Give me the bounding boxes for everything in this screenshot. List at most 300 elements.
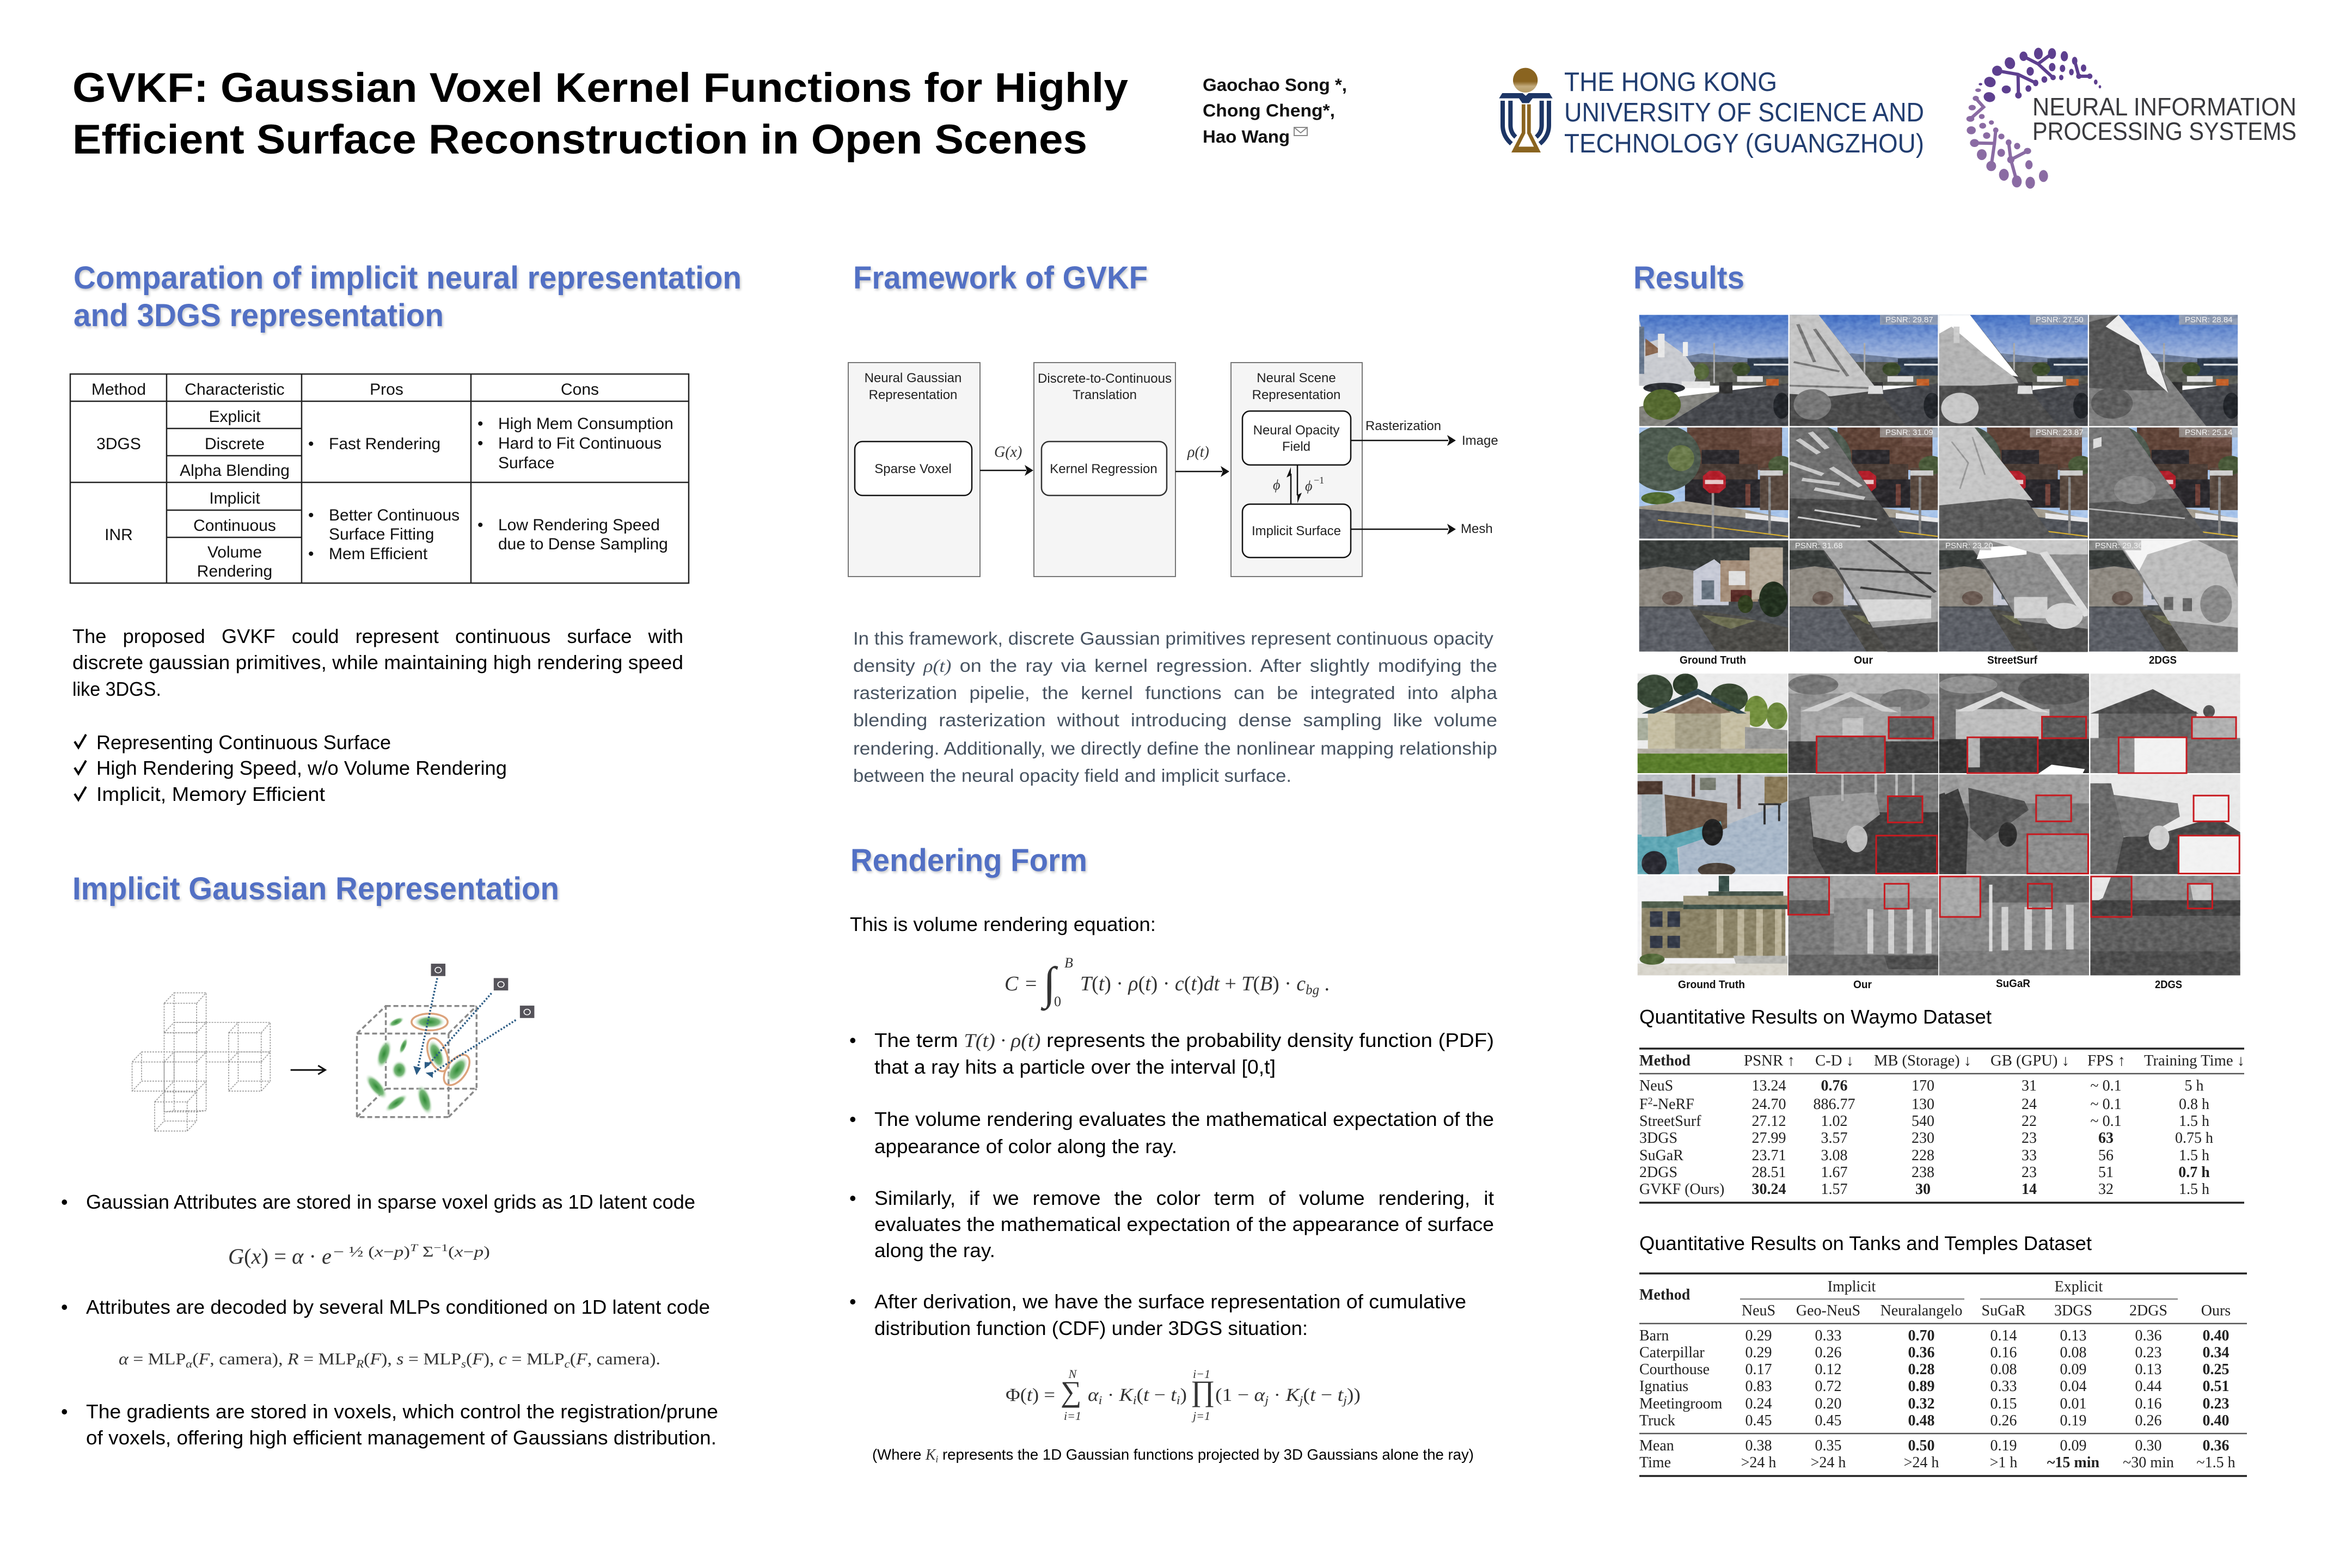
logo: HKUST Guangzhou: UNIVERSITY OF SCIENCE AND	[1564, 98, 1924, 127]
table: Waymo results: 24.70	[1752, 1096, 1786, 1113]
table: Waymo results: 23	[2022, 1164, 2037, 1181]
formula: MLP decoding: (	[364, 1349, 370, 1368]
table: Waymo results: C-D ↓	[1815, 1052, 1854, 1069]
table: Tanks and Temples results: Neuralangelo	[1881, 1302, 1962, 1319]
block: neural gaussian representation: Sparse Voxel	[874, 462, 952, 476]
table: Tanks and Temples results: 0.13	[2060, 1327, 2086, 1344]
check list: Representing Continuous Surface	[96, 731, 391, 754]
logo: Neural Information Processing Systems: NEURAL INFORMATION	[2032, 93, 2296, 121]
footnote: represents the 1D Gaussian functions projected by 3D Gaussians alone the ray)	[938, 1446, 1474, 1463]
comparison table: Characteristic	[185, 381, 285, 399]
formula: CDF: ∑	[1061, 1375, 1081, 1408]
bullet list: gaussian attributes: of voxels, offering high efficient management of Gaussians distribution.	[86, 1426, 716, 1449]
diagram labels: −1	[1314, 475, 1324, 486]
barn 2DGS	[2090, 673, 2240, 773]
table: Tanks and Temples results: 0.28	[1908, 1361, 1935, 1378]
formula: CDF: Φ(t) =	[1006, 1385, 1055, 1405]
table: Waymo results: 0.75 h	[2175, 1130, 2213, 1147]
table: Waymo results: 1.57	[1821, 1181, 1848, 1198]
table: Waymo results: 31	[2022, 1077, 2037, 1094]
table: Tanks and Temples results: 0.38	[1745, 1437, 1772, 1454]
table: Waymo results: 27.99	[1752, 1130, 1786, 1147]
table: Waymo results: 0.7 h	[2178, 1164, 2210, 1181]
truck ground truth	[1638, 774, 1787, 877]
table: Tanks and Temples results: >24 h	[1741, 1454, 1776, 1471]
comparison table: •	[308, 435, 314, 453]
formula: MLP decoding: F, camera).	[576, 1349, 654, 1368]
comparison table: Volume	[207, 543, 262, 561]
arrow	[291, 1065, 326, 1074]
formula: volume rendering: ∫	[1040, 958, 1058, 1011]
diagram labels	[994, 419, 1498, 536]
table: Tanks and Temples results: 0.04	[2060, 1378, 2086, 1395]
bullet list: gaussian attributes: •	[61, 1296, 68, 1318]
table: Tanks and Temples results: 0.33	[1815, 1327, 1841, 1344]
table: Waymo results: ~ 0.1	[2090, 1113, 2122, 1130]
diagram labels: ϕ	[1273, 477, 1280, 493]
table: Waymo results: 3.08	[1821, 1147, 1848, 1164]
courthouse sugar	[1939, 876, 2089, 975]
courthouse ours	[1788, 876, 1938, 975]
formula: MLP decoding: s	[461, 1357, 466, 1370]
formula: MLP decoding: (	[466, 1349, 472, 1368]
logo: Neural Information Processing Systems	[1967, 48, 2296, 189]
formula: CDF: i	[1099, 1393, 1102, 1407]
bullet list: gaussian attributes: •	[61, 1400, 68, 1423]
table: Tanks and Temples results: 0.16	[1990, 1344, 2017, 1361]
table: Tanks and Temples results: Ours	[2201, 1302, 2231, 1319]
table: Tanks and Temples results: 0.89	[1908, 1378, 1935, 1395]
bullet list: rendering: •	[849, 1187, 856, 1209]
intro paragraph: like 3DGS.	[72, 678, 161, 700]
table: Tanks and Temples results: >24 h	[1904, 1454, 1939, 1471]
comparison table: •	[477, 516, 483, 534]
heading: results: Results	[1633, 260, 1744, 296]
comparison table: Discrete	[205, 435, 265, 453]
table: Tanks and Temples results: ~30 min	[2123, 1454, 2174, 1471]
bullet list: gaussian attributes: •	[61, 1191, 68, 1213]
table: Tanks and Temples results: 0.23	[2203, 1395, 2229, 1412]
table: Waymo results: MB (Storage) ↓	[1874, 1052, 1971, 1069]
photo row 3 ground truth	[1639, 540, 1788, 652]
gaussians	[361, 1014, 475, 1117]
formula: CDF: i	[1177, 1393, 1180, 1407]
truck 2DGS	[2090, 774, 2240, 874]
PSNR labels: PSNR: 29.36	[2095, 541, 2143, 550]
courthouse ground truth	[1638, 876, 1787, 975]
PSNR labels: PSNR: 23.20	[1945, 541, 1993, 550]
table: Waymo results: 30.24	[1752, 1181, 1786, 1198]
table: Waymo results: 24	[2022, 1096, 2037, 1113]
formula: gaussian: − ½ ( x−p)	[333, 1244, 408, 1260]
diagram labels: ϕ	[1305, 478, 1312, 494]
table: Waymo results: 27.12	[1752, 1113, 1786, 1130]
table: Tanks and Temples results: 0.48	[1908, 1412, 1935, 1429]
formula: volume rendering: C	[1004, 972, 1019, 995]
table: Waymo results: 230	[1912, 1130, 1934, 1147]
formula: MLP decoding: c	[565, 1357, 571, 1370]
table: Tanks and Temples results: 0.72	[1815, 1378, 1841, 1395]
column captions street: Ground Truth	[1680, 654, 1746, 666]
photo row 1 ground truth	[1639, 315, 1788, 426]
table: Waymo results: 63	[2098, 1130, 2114, 1147]
comparison table	[70, 374, 689, 583]
table: Waymo results: GVKF (Ours)	[1639, 1181, 1724, 1198]
diagram labels: Mesh	[1461, 522, 1493, 536]
table: Tanks and Temples results: 3DGS	[2054, 1302, 2092, 1319]
block: neural gaussian representation	[848, 363, 980, 577]
comparison table: Pros	[370, 381, 403, 399]
column captions tanks: SuGaR	[1996, 978, 2031, 990]
block: discrete-to-continuous translation: Discrete-to-Continuous	[1038, 371, 1172, 386]
table: Waymo results: 56	[2098, 1147, 2114, 1164]
table: Tanks and Temples results: 0.16	[2135, 1395, 2161, 1412]
camera rays	[418, 978, 516, 1075]
table: Tanks and Temples results: Truck	[1639, 1412, 1675, 1429]
formula: gaussian: −1	[434, 1242, 448, 1254]
formula: volume rendering: bg	[1306, 983, 1319, 997]
formula: CDF: )	[1180, 1385, 1187, 1405]
photo row 1 ours	[1789, 315, 1938, 426]
table: Waymo results: F	[1639, 1096, 1648, 1113]
table: Tanks and Temples results: >24 h	[1811, 1454, 1846, 1471]
panel: framework of GVKF	[848, 260, 1498, 786]
table: Tanks and Temples results: 0.24	[1745, 1395, 1772, 1412]
block: neural scene representation	[1231, 363, 1362, 577]
diagram: sparse voxels to gaussians	[132, 964, 534, 1131]
table: Waymo results: NeuS	[1639, 1077, 1673, 1094]
formula: gaussian: (	[448, 1244, 455, 1260]
comparison table: Alpha Blending	[180, 462, 290, 480]
truck sugar	[1939, 774, 2089, 874]
table: Tanks and Temples results: 0.51	[2203, 1378, 2229, 1395]
table: Waymo results: 30	[1915, 1181, 1931, 1198]
comparison table: Surface	[498, 454, 554, 472]
table: Tanks and Temples results: 0.35	[1815, 1437, 1841, 1454]
PSNR labels: PSNR: 29.87	[1885, 315, 1933, 324]
table: Tanks and Temples results: 0.45	[1745, 1412, 1772, 1429]
formula: CDF: i	[1133, 1393, 1136, 1407]
formula: gaussian: x−p)	[455, 1244, 488, 1260]
formula: CDF: t − t	[1310, 1385, 1343, 1405]
column captions tanks: Our	[1853, 979, 1872, 991]
table: Tanks and Temples results: 0.23	[2135, 1344, 2161, 1361]
heading: Tanks table: Quantitative Results on Tanks and Temples Dataset	[1639, 1232, 2092, 1254]
table: Waymo results: 1.67	[1821, 1164, 1848, 1181]
table: Tanks and Temples results: 0.33	[1990, 1378, 2017, 1395]
table: Tanks and Temples results: SuGaR	[1982, 1302, 2026, 1319]
intro paragraph	[72, 625, 683, 700]
bullet list: rendering: The volume rendering evaluates the mathematical expectation of the	[874, 1108, 1494, 1130]
column captions street: Our	[1854, 654, 1873, 666]
heading: implicit gaussian: Implicit Gaussian Representation	[72, 871, 559, 906]
table: Tanks and Temples results: Courthouse	[1639, 1361, 1710, 1378]
table: Tanks and Temples results: 0.14	[1990, 1327, 2017, 1344]
column captions street: StreetSurf	[1987, 654, 2037, 666]
comparison table: •	[308, 506, 314, 524]
table: Tanks and Temples results: 0.26	[1815, 1344, 1841, 1361]
table: Tanks and Temples results: Method	[1639, 1287, 1690, 1303]
title	[72, 65, 1128, 163]
table: Waymo results: 2	[1648, 1095, 1653, 1106]
table: Tanks and Temples results: 0.17	[1745, 1361, 1772, 1378]
table: Tanks and Temples results: 0.34	[2203, 1344, 2229, 1361]
diagram labels: ρ(t)	[1187, 444, 1209, 461]
panel: rendering form	[849, 843, 1494, 1465]
comparison table: Cons	[561, 381, 599, 399]
formula: volume rendering: B	[1064, 955, 1073, 971]
barn ours	[1788, 673, 1938, 773]
formula: CDF: j	[1342, 1393, 1347, 1407]
PSNR labels: PSNR: 31.68	[1795, 541, 1843, 550]
title: GVKF: Gaussian Voxel Kernel Functions for Highly	[72, 65, 1128, 111]
comparison table: 3DGS	[96, 435, 141, 453]
table: Waymo results: 170	[1912, 1077, 1934, 1094]
intro paragraph: The proposed GVKF could represent continuous surface with	[72, 625, 683, 647]
formula: MLP decoding: F, camera), R = MLP	[199, 1349, 351, 1368]
photo row 3 streetsurf	[1939, 540, 2088, 652]
formula: volume rendering: =	[1025, 972, 1037, 995]
PSNR labels: PSNR: 23.87	[2036, 428, 2084, 437]
table: Waymo results: Training Time ↓	[2144, 1052, 2245, 1069]
heading: comparation	[74, 260, 742, 333]
block: discrete-to-continuous translation: Translation	[1073, 388, 1137, 402]
table: Waymo results: 3.57	[1821, 1130, 1848, 1147]
truck ours	[1788, 774, 1938, 874]
table: Waymo results: StreetSurf	[1639, 1113, 1701, 1130]
heading: comparation: and 3DGS representation	[74, 298, 444, 333]
PSNR labels	[1795, 315, 2233, 550]
check list: High Rendering Speed, w/o Volume Rendering	[96, 757, 507, 779]
table: Waymo results: 23.71	[1752, 1147, 1786, 1164]
table: Tanks and Temples results: ~1.5 h	[2196, 1454, 2235, 1471]
formula: CDF: j=1	[1191, 1409, 1210, 1423]
photo row 2 streetsurf	[1939, 427, 2088, 539]
formula: CDF: t − t	[1143, 1385, 1176, 1405]
table: Tanks and Temples results: 0.09	[2060, 1437, 2086, 1454]
table: Tanks and Temples results: Caterpillar	[1639, 1344, 1705, 1361]
table: Tanks and Temples results: 0.70	[1908, 1327, 1935, 1344]
table: Tanks and Temples results: >1 h	[1990, 1454, 2017, 1471]
table: Tanks and Temples results: 0.13	[2135, 1361, 2161, 1378]
table: Tanks and Temples results: 2DGS	[2129, 1302, 2167, 1319]
check list: Implicit, Memory Efficient	[96, 783, 325, 805]
arrows	[980, 435, 1456, 535]
table: Tanks and Temples results: 0.36	[2203, 1437, 2229, 1454]
table: Tanks and Temples results: Ignatius	[1639, 1378, 1688, 1395]
formula: MLP decoding: α = MLP	[119, 1349, 181, 1368]
table: Waymo results: 51	[2098, 1164, 2114, 1181]
formula: gaussian	[228, 1242, 490, 1269]
formula: CDF: K	[1119, 1385, 1134, 1405]
table: Tanks and Temples results	[1639, 1273, 2247, 1476]
courthouse 2DGS	[2090, 876, 2240, 975]
table: Tanks and Temples results: 0.25	[2203, 1361, 2229, 1378]
zoom inset interiors	[1817, 716, 2239, 874]
table: Tanks and Temples results: 0.12	[1815, 1361, 1841, 1378]
table: Waymo results: 886.77	[1813, 1096, 1855, 1113]
formula: CDF: N	[1068, 1367, 1077, 1381]
authors: Gaochao Song *,	[1203, 75, 1347, 95]
comparison table: Surface Fitting	[329, 525, 434, 543]
bullet list: rendering: The term T(t) · ρ(t) represents the probability density function (PDF)	[874, 1029, 1494, 1051]
table: Waymo results: 1.5 h	[2179, 1181, 2209, 1198]
table: Waymo results: 1.02	[1821, 1113, 1848, 1130]
formula: MLP decoding: (	[570, 1349, 576, 1368]
cameras	[431, 964, 534, 1018]
comparison table: •	[477, 434, 483, 452]
table: Waymo results	[1639, 1049, 2245, 1203]
table: Waymo results: 1.5 h	[2179, 1147, 2209, 1164]
table: Tanks and Temples results: 0.08	[1990, 1361, 2017, 1378]
sparse voxel grid	[132, 993, 270, 1131]
table: Tanks and Temples results: 0.40	[2203, 1327, 2229, 1344]
panel: comparison of implicit and 3DGS	[70, 260, 742, 805]
photo row 2 2DGS	[2089, 427, 2238, 539]
bullet list: rendering: along the ray.	[874, 1239, 995, 1261]
formula: volume rendering: .	[1319, 972, 1330, 995]
table: Waymo results: SuGaR	[1639, 1147, 1683, 1164]
table: Tanks and Temples results: 0.19	[1990, 1437, 2017, 1454]
table: Tanks and Temples results: 0.45	[1815, 1412, 1841, 1429]
check list	[75, 731, 507, 805]
table: Tanks and Temples results: 0.26	[2135, 1412, 2161, 1429]
table: Waymo results: Method	[1639, 1052, 1690, 1069]
framework description paragraph: rasterization pipelie, the kernel functions can be integrated into alpha	[853, 683, 1498, 703]
photo row 1 2DGS	[2089, 315, 2238, 426]
block: neural scene representation: Neural Opacity	[1253, 423, 1339, 438]
table: Waymo results: 228	[1912, 1147, 1934, 1164]
bullet list: rendering: that a ray hits a particle over the interval [0,t]	[874, 1056, 1276, 1078]
diagram labels: G(x)	[994, 444, 1022, 461]
formula: CDF: j	[1297, 1393, 1303, 1407]
heading: rendering form: Rendering Form	[850, 843, 1087, 878]
block: neural scene representation: Neural Scene	[1257, 371, 1336, 385]
photo row 1 streetsurf	[1939, 315, 2088, 426]
framework description paragraph: blending rasterization without introducing dense sampling like volume	[853, 710, 1497, 730]
table: Tanks and Temples results: Mean	[1639, 1437, 1674, 1454]
formula: MLP decoding: F), s = MLP	[370, 1349, 456, 1368]
red zoom boxes	[1788, 716, 2239, 917]
table: Tanks and Temples results: 0.50	[1908, 1437, 1935, 1454]
PSNR labels: PSNR: 27.50	[2036, 315, 2084, 324]
table: Tanks and Temples results: Time	[1639, 1454, 1671, 1471]
logo: HKUST Guangzhou: TECHNOLOGY (GUANGZHOU)	[1564, 129, 1924, 158]
comparison table: •	[477, 415, 483, 433]
comparison table: Mem Efficient	[329, 545, 428, 563]
table: Tanks and Temples results: 0.26	[1990, 1412, 2017, 1429]
diagram labels: Image	[1462, 433, 1498, 448]
PSNR labels: PSNR: 31.09	[1885, 428, 1933, 437]
comparison table: Explicit	[209, 408, 261, 426]
framework description paragraph: density ρ(t) on the ray via kernel regression. After slightly modifying the	[853, 656, 1497, 676]
authors: Chong Cheng*,	[1203, 101, 1335, 120]
authors	[1203, 75, 1347, 146]
diagram labels: Rasterization	[1365, 419, 1441, 433]
formula: CDF: (	[1136, 1385, 1143, 1405]
table: Waymo results: ~ 0.1	[2090, 1077, 2122, 1094]
table: Tanks and Temples results: 0.15	[1990, 1395, 2017, 1412]
bullet list: rendering: appearance of color along the ray.	[874, 1135, 1177, 1157]
formula: CDF: j	[1263, 1393, 1269, 1407]
table: Waymo results: GB (GPU) ↓	[1990, 1052, 2069, 1069]
formula: CDF: i=1	[1064, 1409, 1081, 1423]
formula: CDF: (	[1303, 1385, 1310, 1405]
table: Waymo results: 0.8 h	[2179, 1096, 2209, 1113]
formula: CDF: K	[1285, 1385, 1301, 1405]
heading: comparation: Comparation of implicit neural representation	[74, 260, 742, 296]
bullet list: rendering: •	[849, 1108, 856, 1130]
table: Waymo results: 0.76	[1821, 1077, 1848, 1094]
formula: CDF	[1006, 1367, 1361, 1423]
table: Tanks and Temples results: 0.30	[2135, 1437, 2161, 1454]
table: Waymo results: 238	[1912, 1164, 1934, 1181]
formula: CDF: ))	[1347, 1385, 1361, 1405]
table: Waymo results: 22	[2022, 1113, 2037, 1130]
comparison table: INR	[105, 526, 133, 544]
table: Waymo results: 23	[2022, 1130, 2037, 1147]
table: Waymo results: -NeRF	[1653, 1096, 1694, 1113]
footnote: i	[935, 1454, 938, 1465]
table: Waymo results: 33	[2022, 1147, 2037, 1164]
column captions tanks: 2DGS	[2155, 979, 2182, 991]
title: Efficient Surface Reconstruction in Open Scenes	[72, 117, 1087, 163]
bullet list: gaussian attributes	[61, 1191, 718, 1449]
formula: CDF: ·	[1269, 1385, 1286, 1405]
PSNR labels: PSNR: 25.14	[2185, 428, 2233, 437]
table: Tanks and Temples results: 0.36	[1908, 1344, 1935, 1361]
panel: implicit gaussian representation	[61, 871, 718, 1449]
table: Tanks and Temples results: 0.19	[2060, 1412, 2086, 1429]
comparison table: High Mem Consumption	[498, 415, 673, 433]
table: Tanks and Temples results: Implicit	[1828, 1278, 1876, 1295]
table: Waymo results: FPS ↑	[2087, 1052, 2126, 1069]
formula: CDF: ∏	[1191, 1375, 1215, 1407]
formula: MLP decoding: R	[356, 1357, 364, 1370]
column captions street	[1680, 654, 2177, 666]
column captions street: 2DGS	[2149, 654, 2177, 666]
bullet list: rendering: distribution function (CDF) under 3DGS situation:	[874, 1317, 1308, 1339]
table: Waymo results: 130	[1912, 1096, 1934, 1113]
table: Waymo results: PSNR ↑	[1744, 1052, 1795, 1069]
photo row 3 ours	[1790, 540, 1939, 652]
table: Tanks and Temples results: 0.01	[2060, 1395, 2086, 1412]
comparison table: Hard to Fit Continuous	[498, 434, 661, 452]
authors: Hao Wang	[1203, 127, 1290, 146]
barn ground truth	[1636, 673, 1787, 773]
formula: gaussian: Σ	[418, 1244, 434, 1260]
table: Tanks and Temples results: Geo-NeuS	[1796, 1302, 1860, 1319]
formula: gaussian: G(x) = α · e	[228, 1244, 332, 1269]
formula: volume rendering: 0	[1054, 994, 1061, 1009]
bullet list: rendering: •	[849, 1290, 856, 1313]
gaussian voxel cube	[357, 1006, 476, 1117]
figure: Waymo street comparison	[1627, 315, 2243, 666]
logo: HKUST Guangzhou	[1499, 68, 1924, 158]
bullet list: gaussian attributes: Attributes are decoded by several MLPs conditioned on 1D latent code	[86, 1296, 710, 1318]
block: neural scene representation: Field	[1282, 439, 1310, 454]
comparison table: Method	[91, 381, 146, 399]
barn sugar	[1939, 673, 2093, 773]
intro paragraph: discrete gaussian primitives, while maintaining high rendering speed	[72, 651, 683, 673]
table: Tanks and Temples results: 0.20	[1815, 1395, 1841, 1412]
table: Tanks and Temples results: 0.29	[1745, 1344, 1772, 1361]
formula: CDF: i−1	[1193, 1367, 1210, 1381]
formula: CDF: (1 − α	[1215, 1385, 1264, 1405]
table: Tanks and Temples results: Meetingroom	[1639, 1395, 1723, 1412]
framework description paragraph	[853, 628, 1498, 786]
table: Tanks and Temples results: 0.32	[1908, 1395, 1935, 1412]
